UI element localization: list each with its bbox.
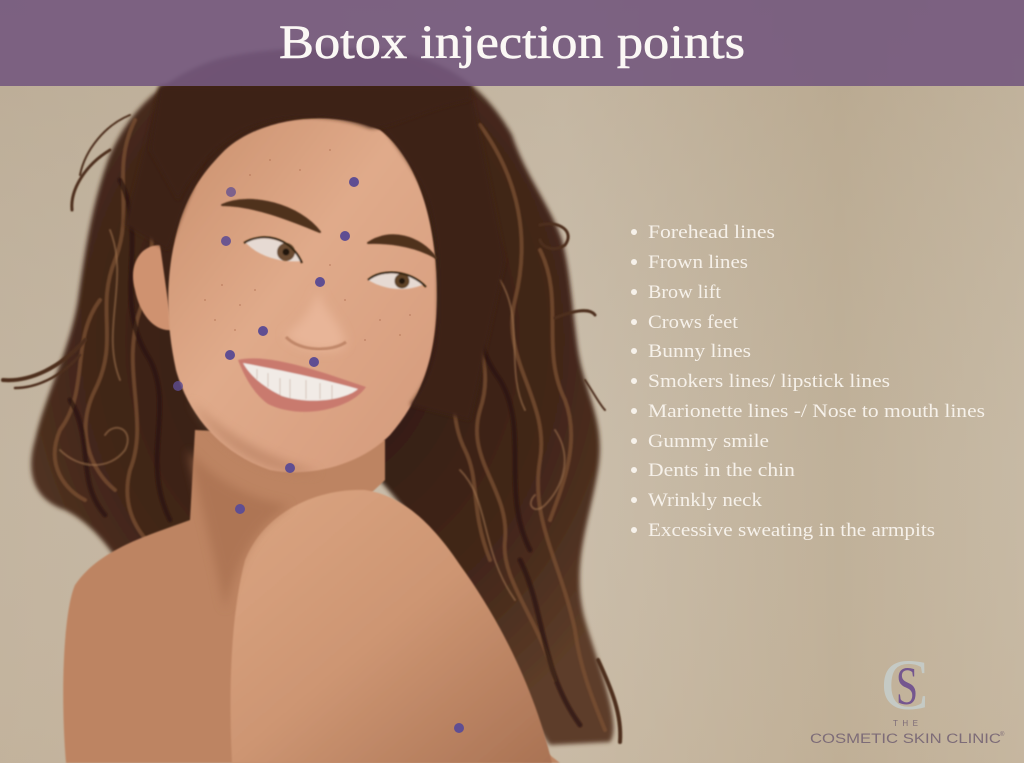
ear: [133, 245, 172, 330]
right brow: [368, 235, 436, 258]
treatment list: Excessive sweating in the armpits: [648, 521, 935, 541]
logo wordmark: [810, 719, 1005, 746]
header band: [0, 0, 1024, 86]
treatment list: Wrinkly neck: [648, 491, 763, 511]
treatment list: Frown lines: [648, 253, 748, 273]
treatment list: Marionette lines -/ Nose to mouth lines: [648, 402, 985, 422]
logo wordmark: THE: [893, 719, 918, 728]
face: [168, 118, 437, 472]
treatment list: Forehead lines: [648, 223, 775, 243]
hair back mass: [3, 48, 620, 745]
hair curls and highlights: [55, 110, 605, 730]
flyaway strands: [3, 115, 620, 742]
nose shadow: [286, 337, 346, 349]
back and neck skin: [63, 430, 560, 763]
left brow: [222, 200, 320, 232]
injection points: [173, 177, 464, 733]
jaw shading: [190, 400, 320, 473]
clinic logo: [810, 645, 1005, 746]
treatment list: Smokers lines/ lipstick lines: [648, 372, 890, 392]
treatment list: Crows feet: [648, 313, 739, 333]
treatment list: Gummy smile: [648, 432, 769, 452]
neck shadow: [188, 450, 290, 610]
right eye: [368, 272, 426, 289]
treatment list: Dents in the chin: [648, 461, 795, 481]
nose: [285, 290, 345, 351]
treatment list: [631, 223, 985, 541]
logo wordmark: ®: [1000, 731, 1005, 738]
hair fringe: [125, 86, 240, 250]
logo wordmark: COSMETIC SKIN CLINIC: [810, 731, 1001, 746]
treatment list: Brow lift: [648, 283, 722, 303]
logo monogram: C: [881, 645, 929, 725]
freckles: [204, 149, 411, 341]
photo: woman looking over her shoulder: [3, 48, 620, 763]
mouth: [238, 358, 366, 412]
title: Botox injection points: [279, 16, 745, 69]
near shoulder: [231, 490, 552, 763]
left eye: [244, 237, 302, 263]
treatment list: Bunny lines: [648, 342, 751, 362]
logo monogram: S: [896, 656, 918, 716]
